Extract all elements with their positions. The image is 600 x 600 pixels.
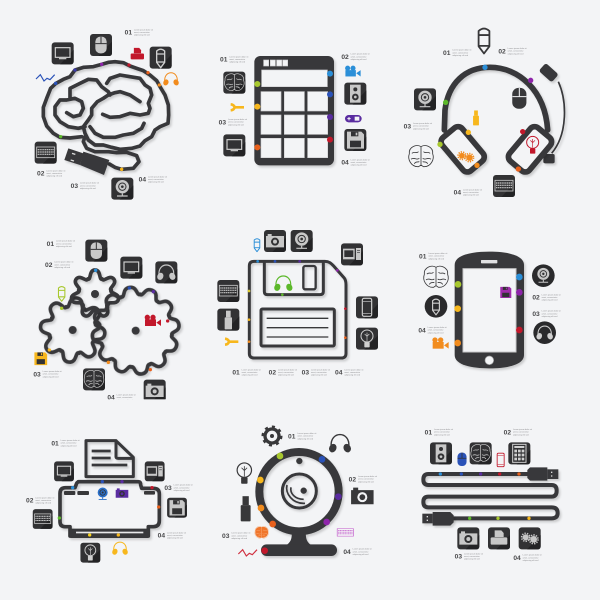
icon: bulb bbox=[527, 136, 539, 154]
floppy outline bbox=[249, 261, 346, 358]
road markers bbox=[257, 453, 342, 554]
icon: phone bbox=[497, 453, 504, 467]
label 03: amet, consectetur bbox=[228, 121, 244, 124]
label 04: amet, consectetur bbox=[344, 371, 360, 374]
label 02: 02 bbox=[269, 370, 276, 377]
icon: calculator tile bbox=[508, 442, 530, 464]
label 04: 04 bbox=[343, 549, 351, 556]
label 02: 02 bbox=[532, 295, 540, 302]
label 04 bbox=[158, 531, 186, 540]
icon: pencil circle bbox=[425, 295, 447, 318]
label 04: Lorem ipsum dolor sit bbox=[428, 326, 447, 329]
label 01: Lorem ipsum dolor sit bbox=[61, 439, 80, 442]
icon: headphones bbox=[328, 435, 352, 454]
label 01: Lorem ipsum dolor sit bbox=[434, 428, 453, 431]
label 03 bbox=[219, 118, 247, 126]
icon: brain bbox=[255, 526, 269, 538]
label 03: amet, consectetur bbox=[311, 371, 327, 374]
label 02 bbox=[341, 53, 370, 61]
calculator display and keys bbox=[261, 60, 328, 158]
label 03: 03 bbox=[302, 370, 309, 377]
icon: mouse tile bbox=[85, 240, 107, 262]
label 01 bbox=[125, 28, 153, 37]
road markers bbox=[58, 480, 160, 537]
label 04: Lorem ipsum dolor sit bbox=[167, 531, 186, 534]
label 01: 01 bbox=[51, 440, 59, 447]
icon: computer tile bbox=[341, 243, 363, 265]
label 02: adipiscing elit sed bbox=[46, 175, 62, 178]
clipped lower edge bbox=[97, 399, 173, 409]
label 04 bbox=[454, 188, 482, 197]
label 03: 03 bbox=[219, 119, 226, 126]
label 02: Lorem ipsum dolor sit bbox=[351, 53, 370, 56]
label 01: 01 bbox=[232, 370, 240, 377]
label 04: adipiscing elit sed bbox=[463, 194, 479, 197]
panel: calculator bbox=[219, 53, 370, 167]
icon: wave bbox=[238, 550, 257, 556]
label 04: Lorem ipsum dolor sit bbox=[523, 554, 542, 557]
label 02: Lorem ipsum dolor sit bbox=[46, 169, 66, 172]
road markers bbox=[437, 65, 533, 172]
label 04: 04 bbox=[418, 327, 426, 334]
label 02: adipiscing elit sed bbox=[54, 266, 70, 269]
icon: camera tile bbox=[264, 230, 286, 252]
label 01 bbox=[47, 240, 75, 248]
icon: phone tile bbox=[356, 296, 378, 318]
icon: camera tile bbox=[144, 380, 166, 402]
label 02: amet, consectetur bbox=[351, 55, 367, 58]
icon: floppy tile bbox=[344, 129, 366, 151]
icon: mouse bbox=[512, 88, 526, 109]
right usb plug bbox=[527, 467, 558, 481]
label 02: 02 bbox=[26, 498, 34, 505]
label 03: amet, consectetur bbox=[464, 555, 480, 558]
label 02: adipiscing elit sed bbox=[508, 52, 523, 55]
label 01: 01 bbox=[419, 253, 427, 260]
icon: bulb tile bbox=[356, 328, 378, 350]
label 04 bbox=[343, 548, 372, 556]
icon: wave bbox=[36, 75, 55, 81]
label 01: Lorem ipsum dolor sit bbox=[297, 432, 317, 435]
label 03: 03 bbox=[404, 123, 411, 130]
label 02 bbox=[498, 47, 527, 55]
road markers bbox=[48, 269, 169, 371]
label 04: 04 bbox=[341, 160, 349, 167]
icon: floppy tile bbox=[167, 498, 187, 518]
label 02: adipiscing elit sed bbox=[351, 58, 366, 61]
label 04: 04 bbox=[107, 395, 115, 402]
label 03 bbox=[71, 182, 99, 190]
label 04: adipiscing elit sed bbox=[523, 559, 538, 562]
icon: usb stick bbox=[473, 110, 479, 125]
calculator body bbox=[254, 56, 334, 165]
label 04: 04 bbox=[454, 190, 461, 197]
label 02: amet, consectetur bbox=[46, 172, 62, 175]
label 02: 02 bbox=[349, 476, 356, 483]
icon: wrench bbox=[231, 104, 244, 110]
label 02: amet, consectetur bbox=[508, 50, 524, 53]
label 03: adipiscing elit sed bbox=[464, 558, 480, 561]
icon: headphones bbox=[273, 276, 294, 292]
label 01: 01 bbox=[443, 50, 451, 57]
floppy label lines bbox=[267, 318, 328, 337]
label 04: Lorem ipsum dolor sit bbox=[117, 393, 136, 396]
label 02: adipiscing elit sed bbox=[513, 433, 529, 436]
label 03: 03 bbox=[455, 554, 462, 561]
panel: floppy disk bbox=[217, 230, 378, 377]
icon: brain tile bbox=[470, 442, 492, 464]
label 03: 03 bbox=[164, 485, 172, 492]
icon: webcam tile bbox=[111, 178, 133, 200]
label 02: amet, consectetur bbox=[278, 371, 294, 374]
label 01: adipiscing elit sed bbox=[452, 54, 468, 57]
icon: brain tile bbox=[83, 368, 105, 390]
label 03: amet, consectetur bbox=[413, 125, 429, 128]
label 02: amet, consectetur bbox=[542, 296, 558, 299]
label 02: adipiscing elit sed bbox=[35, 502, 51, 505]
label 03: adipiscing elit sed bbox=[80, 187, 96, 190]
label 02: Lorem ipsum dolor sit bbox=[35, 496, 55, 499]
label 02 bbox=[504, 428, 532, 436]
icon: gears bbox=[458, 152, 474, 162]
label 01: adipiscing elit sed bbox=[297, 437, 313, 440]
label 01: amet, consectetur bbox=[229, 58, 245, 61]
label 02 bbox=[349, 475, 377, 483]
icon: computer tile bbox=[145, 461, 165, 481]
road markers bbox=[454, 274, 523, 346]
label 01: adipiscing elit sed bbox=[61, 444, 76, 447]
phone speaker and home button bbox=[481, 260, 497, 365]
label 04: amet, consectetur bbox=[148, 178, 164, 181]
label 03: Lorem ipsum dolor sit bbox=[174, 484, 193, 487]
label 02: adipiscing elit sed bbox=[358, 480, 374, 483]
printer body bbox=[60, 482, 159, 538]
label 01: 01 bbox=[125, 30, 132, 37]
icon: keyboard tile bbox=[493, 175, 515, 197]
icon: usb tile bbox=[217, 309, 239, 331]
label 03 bbox=[455, 552, 483, 561]
label 02: 02 bbox=[504, 429, 511, 436]
icon: floppy bbox=[500, 287, 511, 298]
label 04: amet, consectetur bbox=[463, 191, 479, 194]
icon: webcam bbox=[98, 487, 108, 499]
panel: webcam bbox=[222, 427, 377, 556]
icon: pencil bbox=[58, 287, 65, 301]
label 02 bbox=[26, 496, 55, 505]
label 02: Lorem ipsum dolor sit bbox=[508, 47, 527, 50]
label 04: amet, consectetur bbox=[353, 550, 369, 553]
label 02: Lorem ipsum dolor sit bbox=[54, 261, 74, 264]
label 02: 02 bbox=[45, 262, 53, 269]
label 02: 02 bbox=[341, 54, 349, 61]
label 04: 04 bbox=[139, 177, 146, 184]
icon: keyboard tile bbox=[35, 142, 57, 164]
icon: headphones tile bbox=[155, 261, 177, 283]
label 04: adipiscing elit sed bbox=[344, 374, 360, 377]
label 02: Lorem ipsum dolor sit bbox=[358, 475, 377, 478]
label 03: Lorem ipsum dolor sit bbox=[413, 122, 432, 125]
label 02: amet, consectetur bbox=[358, 478, 374, 481]
icon: brain bbox=[424, 266, 448, 287]
road markers bbox=[439, 472, 531, 520]
label 01: amet, consectetur bbox=[297, 435, 313, 438]
label 01 bbox=[425, 428, 453, 436]
icon: pencil bbox=[479, 29, 489, 53]
label 04: adipiscing elit sed bbox=[148, 181, 164, 184]
label 03: adipiscing elit sed bbox=[542, 315, 557, 318]
road markers bbox=[54, 63, 161, 171]
label 04: amet, consectetur bbox=[117, 396, 133, 399]
icon: printer bbox=[131, 48, 144, 59]
label 03 bbox=[302, 368, 330, 377]
icon: webcam tile bbox=[414, 88, 436, 110]
label 04 bbox=[107, 393, 136, 402]
label 01 bbox=[288, 432, 317, 440]
label 02: Lorem ipsum dolor sit bbox=[513, 428, 532, 431]
label 03: adipiscing elit sed bbox=[174, 489, 189, 492]
icon: pencil bbox=[254, 239, 260, 252]
label 04 bbox=[341, 158, 370, 167]
label 04: Lorem ipsum dolor sit bbox=[463, 188, 482, 191]
label 01: amet, consectetur bbox=[428, 255, 444, 258]
label 04: adipiscing elit sed bbox=[353, 553, 368, 556]
label 01: Lorem ipsum dolor sit bbox=[134, 28, 153, 31]
label 01: 01 bbox=[47, 241, 54, 248]
label 03: amet, consectetur bbox=[542, 312, 558, 315]
label 01 bbox=[419, 252, 448, 260]
printer tray slot and buttons bbox=[64, 491, 155, 533]
label 04: adipiscing elit sed bbox=[351, 164, 366, 167]
label 01: amet, consectetur bbox=[452, 51, 468, 54]
icon: headphones bbox=[162, 73, 180, 86]
label 03: amet, consectetur bbox=[43, 373, 59, 376]
label 01: amet, consectetur bbox=[134, 31, 150, 34]
label 02: amet, consectetur bbox=[35, 499, 51, 502]
icon: keyboard bbox=[337, 529, 353, 536]
label 02: adipiscing elit sed bbox=[542, 299, 557, 302]
icon: video camera bbox=[432, 337, 449, 349]
label 03: Lorem ipsum dolor sit bbox=[43, 370, 62, 373]
label 03: 03 bbox=[33, 371, 41, 378]
label 03 bbox=[164, 484, 193, 492]
icon: brain tile bbox=[223, 72, 245, 94]
label 01: 01 bbox=[425, 429, 432, 436]
label 03: adipiscing elit sed bbox=[311, 374, 327, 377]
label 03: Lorem ipsum dolor sit bbox=[231, 532, 251, 535]
label 02: amet, consectetur bbox=[54, 263, 70, 266]
icon: monitor tile bbox=[120, 257, 142, 279]
label 01: adipiscing elit sed bbox=[134, 34, 150, 37]
label 04: 04 bbox=[158, 533, 165, 540]
cable road bbox=[423, 474, 558, 518]
label 03: amet, consectetur bbox=[80, 184, 96, 187]
label 03: 03 bbox=[222, 533, 230, 540]
label 02: adipiscing elit sed bbox=[278, 374, 294, 377]
label 04: 04 bbox=[513, 555, 521, 562]
panel: smartphone bbox=[418, 252, 561, 368]
label 04: adipiscing elit sed bbox=[167, 537, 183, 540]
icon: camera bbox=[116, 488, 128, 498]
label 03 bbox=[532, 310, 561, 318]
label 01: 01 bbox=[220, 57, 228, 64]
right ear cup bbox=[506, 124, 554, 174]
icon: monitor tile bbox=[223, 134, 245, 156]
icon: monitor tile bbox=[52, 42, 74, 64]
label 01 bbox=[51, 439, 80, 447]
icon: gear bbox=[263, 427, 281, 445]
icon: keyboard tile bbox=[33, 509, 53, 529]
label 03: amet, consectetur bbox=[231, 534, 247, 537]
road markers bbox=[248, 260, 347, 343]
icon: monitor tile bbox=[54, 461, 74, 481]
road markers bbox=[254, 71, 333, 150]
label 02 bbox=[532, 293, 561, 302]
label 04: Lorem ipsum dolor sit bbox=[353, 548, 372, 551]
label 01 bbox=[443, 49, 472, 57]
panel: gears bbox=[33, 240, 185, 409]
panel: usb cable bbox=[422, 428, 558, 562]
label 01: Lorem ipsum dolor sit bbox=[428, 252, 448, 255]
label 02: 02 bbox=[37, 171, 45, 178]
label 03: 03 bbox=[532, 311, 540, 318]
icon: mouse tile bbox=[90, 34, 112, 56]
label 01: Lorem ipsum dolor sit bbox=[452, 49, 472, 52]
icon: headphones circle bbox=[533, 321, 556, 344]
icon: gamepad bbox=[345, 115, 362, 122]
label 03: Lorem ipsum dolor sit bbox=[228, 118, 247, 121]
label 03 bbox=[222, 532, 251, 540]
icon: keyboard tile bbox=[217, 280, 239, 302]
label 03: 03 bbox=[71, 183, 78, 190]
panel: headphones bbox=[404, 29, 564, 197]
big right gear bbox=[86, 281, 185, 380]
icon: video camera bbox=[145, 315, 161, 326]
label 02: Lorem ipsum dolor sit bbox=[278, 368, 297, 371]
large left gear bbox=[37, 294, 109, 366]
left ear cup bbox=[439, 124, 487, 174]
label 03: Lorem ipsum dolor sit bbox=[464, 552, 483, 555]
headband bbox=[444, 67, 548, 130]
label 03: adipiscing elit sed bbox=[231, 537, 247, 540]
label 01: amet, consectetur bbox=[242, 371, 258, 374]
webcam ring and base bbox=[259, 452, 339, 556]
label 04: adipiscing elit sed bbox=[428, 331, 443, 334]
label 04: amet, consectetur bbox=[428, 329, 444, 332]
label 01: adipiscing elit sed bbox=[434, 433, 450, 436]
label 01: Lorem ipsum dolor sit bbox=[229, 55, 249, 58]
panel: brain road bbox=[35, 28, 180, 200]
label 03: Lorem ipsum dolor sit bbox=[80, 182, 99, 185]
phone body bbox=[455, 252, 524, 368]
label 01: 01 bbox=[288, 433, 296, 440]
small top gear bbox=[70, 270, 120, 319]
label 03: Lorem ipsum dolor sit bbox=[311, 368, 330, 371]
icon: camera tile bbox=[457, 527, 479, 549]
label 04: amet, consectetur bbox=[523, 556, 539, 559]
label 04 bbox=[139, 175, 167, 184]
icon: gears tile bbox=[519, 527, 541, 549]
label 04 bbox=[418, 326, 447, 334]
label 03 bbox=[33, 370, 62, 378]
phone screen bbox=[463, 269, 516, 352]
label 01 bbox=[220, 55, 249, 64]
icon: bulb bbox=[237, 463, 252, 484]
icon: floppy bbox=[34, 352, 47, 365]
label 02: amet, consectetur bbox=[513, 431, 529, 434]
label 04: Lorem ipsum dolor sit bbox=[351, 158, 370, 161]
label 01: amet, consectetur bbox=[434, 431, 450, 434]
label 02 bbox=[269, 368, 297, 377]
icon: printer tile bbox=[488, 527, 510, 549]
label 01 bbox=[232, 368, 261, 377]
icon: usb stick bbox=[241, 496, 251, 521]
icon: bulb tile bbox=[80, 543, 100, 563]
usb plug bbox=[64, 148, 109, 175]
label 01: adipiscing elit sed bbox=[242, 374, 257, 377]
label 04 bbox=[335, 368, 364, 377]
icon: speaker tile bbox=[344, 83, 366, 105]
label 03: adipiscing elit sed bbox=[413, 127, 429, 130]
label 01: adipiscing elit sed bbox=[229, 61, 245, 64]
panel: printer bbox=[26, 439, 193, 563]
label 01: amet, consectetur bbox=[61, 442, 77, 445]
icon: webcam tile bbox=[291, 230, 313, 252]
label 04: Lorem ipsum dolor sit bbox=[148, 175, 167, 178]
label 03: adipiscing elit sed bbox=[228, 123, 244, 126]
icon: wrench bbox=[225, 339, 238, 345]
icon: webcam circle bbox=[532, 264, 555, 287]
label 04: amet, consectetur bbox=[167, 534, 183, 537]
label 01: adipiscing elit sed bbox=[56, 245, 72, 248]
icon: mouse bbox=[457, 453, 467, 466]
label 01: adipiscing elit sed bbox=[428, 257, 444, 260]
label 04 bbox=[513, 554, 542, 562]
microphone boom bbox=[539, 63, 564, 163]
label 02: 02 bbox=[498, 48, 506, 55]
label 04: 04 bbox=[335, 370, 343, 377]
label 04: amet, consectetur bbox=[351, 161, 367, 164]
icon: headphones bbox=[111, 542, 129, 556]
label 03 bbox=[404, 122, 432, 130]
icon: pencil tile bbox=[150, 47, 172, 69]
label 01: Lorem ipsum dolor sit bbox=[56, 240, 75, 243]
label 03: Lorem ipsum dolor sit bbox=[542, 310, 561, 313]
icon: speaker tile bbox=[430, 442, 452, 464]
left usb plug bbox=[422, 512, 454, 526]
label 03: adipiscing elit sed bbox=[43, 375, 58, 378]
brain road path bbox=[43, 62, 169, 169]
label 02: Lorem ipsum dolor sit bbox=[542, 293, 561, 296]
label 04: adipiscing elit sed bbox=[117, 399, 132, 402]
label 02 bbox=[37, 169, 66, 178]
paper sheet bbox=[86, 441, 133, 477]
label 04: Lorem ipsum dolor sit bbox=[344, 368, 364, 371]
icon: camera bbox=[351, 488, 374, 504]
label 01: Lorem ipsum dolor sit bbox=[242, 368, 261, 371]
icon: video camera bbox=[345, 66, 361, 76]
icon: brain bbox=[409, 146, 433, 167]
label 03: amet, consectetur bbox=[174, 486, 190, 489]
label 02 bbox=[45, 261, 74, 269]
label 01: amet, consectetur bbox=[56, 242, 72, 245]
webcam lens bbox=[282, 458, 316, 508]
